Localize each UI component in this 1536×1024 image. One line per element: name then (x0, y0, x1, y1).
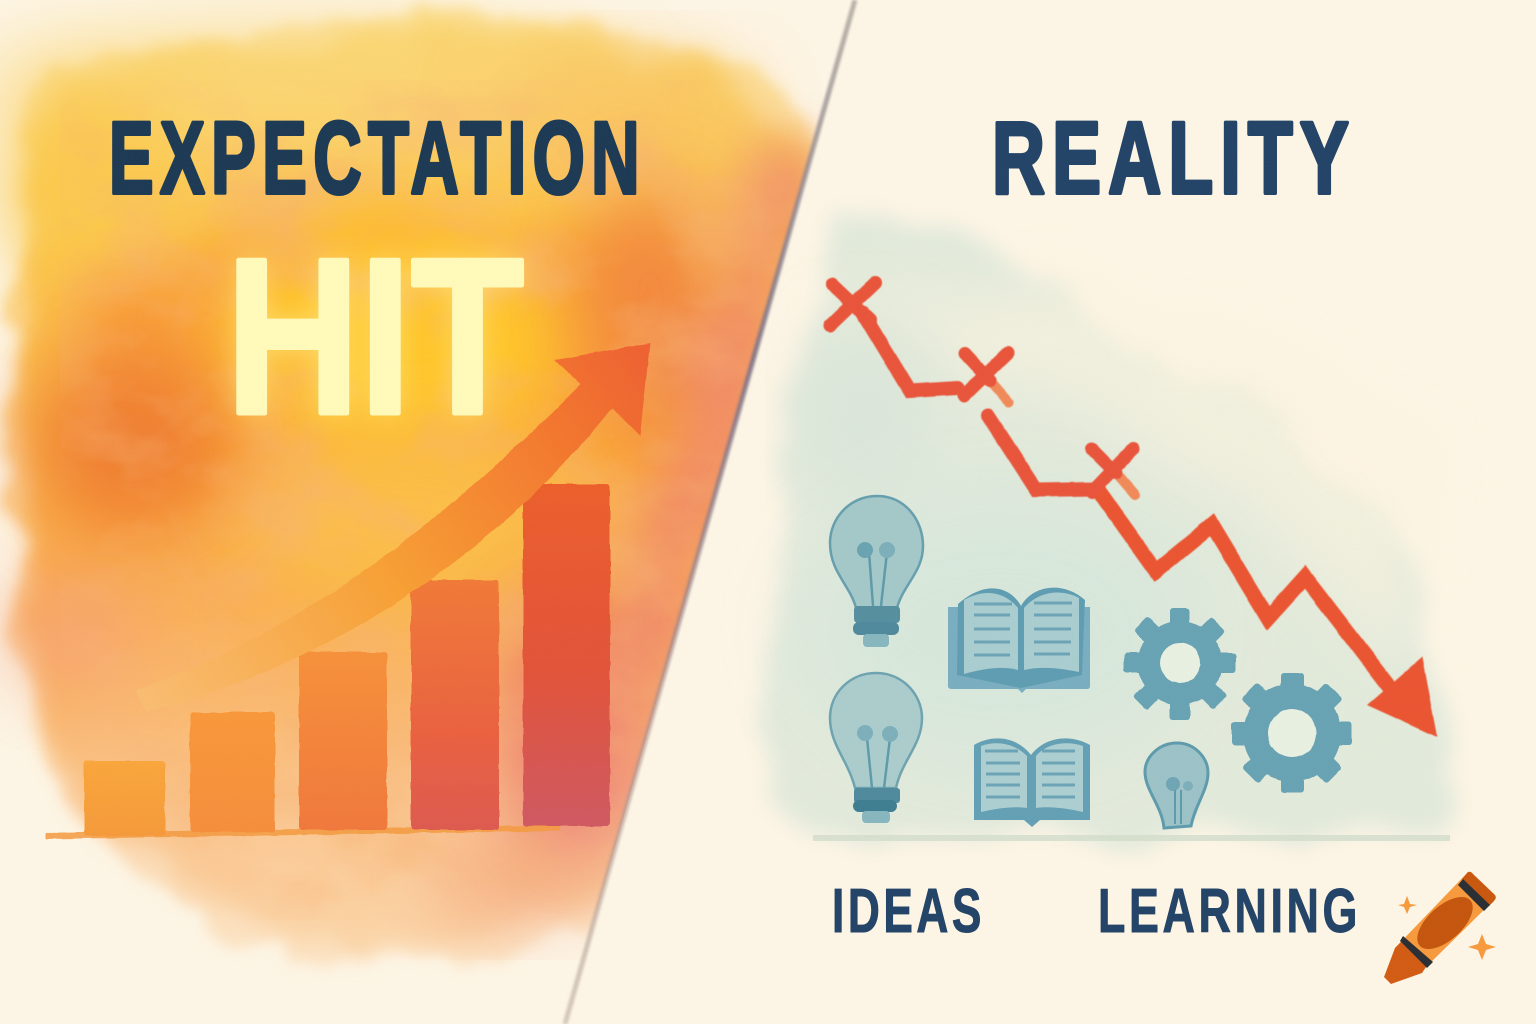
bar 4 (411, 580, 499, 830)
mottled pigment (60, 80, 810, 920)
x mark 3 (1092, 449, 1135, 495)
arrow: rising curve (136, 343, 650, 712)
panel: reality watercolor wash (764, 215, 1455, 835)
icon: crayon with sparkles (1384, 872, 1496, 984)
bar 3 (299, 652, 387, 830)
line segment 3 (1098, 490, 1392, 690)
sparkle small (1398, 896, 1417, 914)
icon: open book 1 (948, 588, 1090, 693)
line segment 1 (862, 312, 958, 391)
icon: light bulb 1 (830, 496, 923, 647)
label: LEARNING: LEARNING (1098, 877, 1361, 946)
icon: open book 2 (974, 738, 1090, 827)
sparkle large (1468, 934, 1496, 960)
bar 5 (523, 484, 610, 826)
icon: small light bulb (1145, 743, 1208, 828)
line segment 2 (988, 416, 1095, 490)
arrowhead (1367, 657, 1437, 737)
heading: HIT: HIT (226, 213, 524, 461)
icons: blue watercolor icons (830, 496, 1352, 828)
heading: HIT: HIT (226, 213, 524, 461)
chart: falling red line (830, 283, 1437, 737)
ground line under icons (813, 835, 1450, 841)
x mark 1 (830, 283, 875, 326)
icon: gear 1 (1124, 608, 1236, 720)
baseline (46, 828, 560, 836)
x mark 2 (964, 353, 1009, 402)
label: IDEAS: IDEAS (832, 877, 985, 946)
divider: diagonal line (565, 0, 855, 1024)
bar 2 (190, 712, 275, 832)
bar chart: rising bars (46, 484, 610, 836)
heading: REALITY: REALITY (992, 101, 1356, 215)
icon: gear 2 (1232, 673, 1352, 793)
icon: light bulb 2 (830, 673, 922, 823)
pale paper gap behind red line (825, 280, 1420, 660)
heading: EXPECTATION: EXPECTATION (109, 101, 646, 215)
bar 1 (84, 761, 165, 836)
panel: expectation watercolor wash (0, 15, 840, 960)
